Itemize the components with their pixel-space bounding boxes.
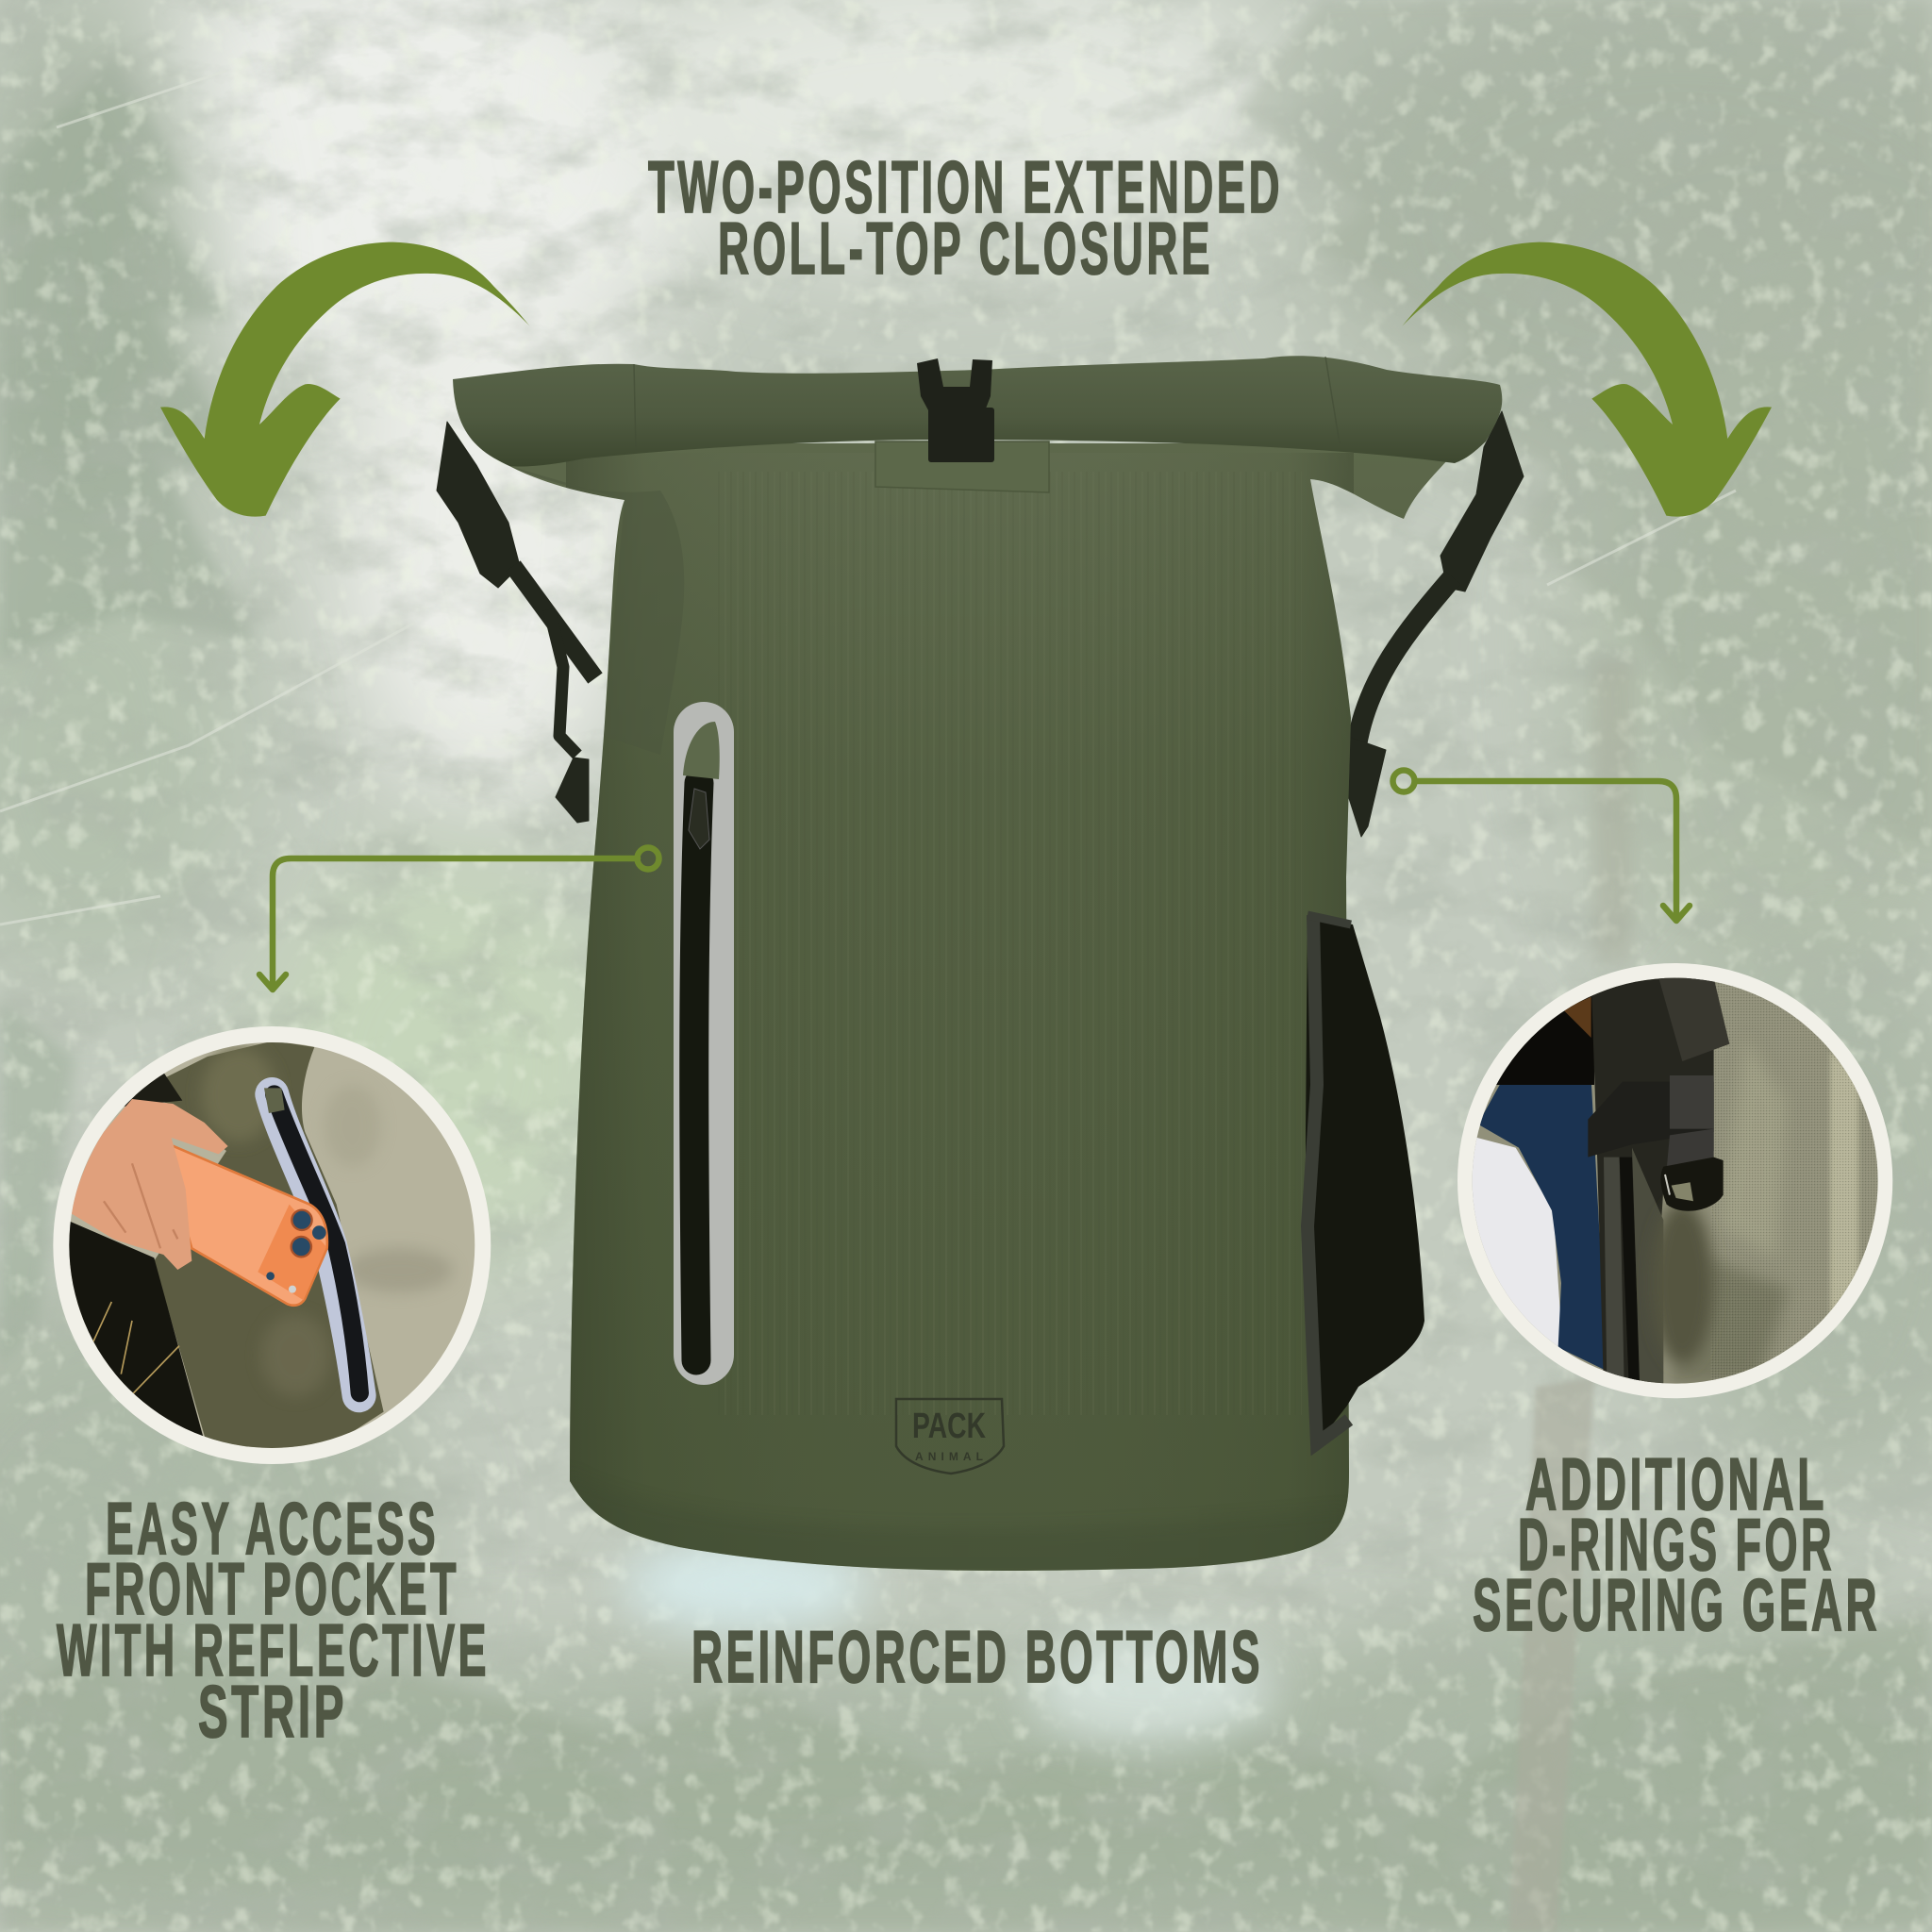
label: easy access front pocket: EASY ACCESS bbox=[106, 1487, 439, 1570]
olive sleeve bbox=[132, 1041, 384, 1456]
label: easy access front pocket: FRONT POCKET bbox=[85, 1547, 459, 1630]
dark upper corner bbox=[1474, 981, 1594, 1085]
label: easy access front pocket bbox=[57, 1487, 490, 1753]
connector: d-ring callout bbox=[1392, 770, 1690, 921]
connector: pocket callout bbox=[259, 847, 658, 990]
side seam bbox=[1591, 978, 1714, 1390]
webbing strap bbox=[1658, 978, 1729, 1061]
backpack bbox=[437, 356, 1524, 1585]
khaki fabric bbox=[69, 1042, 475, 1448]
fabric texture bbox=[509, 453, 1354, 1585]
arrow: left curved bbox=[160, 242, 530, 517]
trunks bbox=[1509, 1377, 1594, 1932]
phone bbox=[170, 1144, 327, 1306]
arrow: right curved bbox=[1402, 242, 1772, 517]
logo: Pack Animal: PACK bbox=[912, 1407, 986, 1446]
right strap and buckle bbox=[1346, 411, 1524, 837]
label: easy access front pocket: STRIP bbox=[198, 1670, 347, 1753]
white surface bbox=[1443, 1129, 1563, 1384]
heading: roll-top closure: ROLL-TOP CLOSURE bbox=[718, 207, 1213, 290]
photo circle: front pocket bbox=[38, 1026, 509, 1472]
mesh side pocket bbox=[1306, 915, 1424, 1449]
label: reinforced bottoms: REINFORCED BOTTOMS bbox=[691, 1615, 1263, 1698]
label: additional d-rings bbox=[1473, 1442, 1880, 1646]
bag body bbox=[509, 443, 1462, 1571]
photo circle: d-ring bbox=[1443, 963, 1915, 1398]
heading: roll-top closure: TWO-POSITION EXTENDED bbox=[648, 145, 1283, 228]
roll-top buckle bbox=[917, 358, 994, 462]
left strap and buckle bbox=[437, 422, 595, 823]
hand bbox=[72, 1099, 228, 1270]
logo: Pack Animal bbox=[896, 1399, 1004, 1474]
black background bbox=[38, 1208, 208, 1453]
reflective zip pocket bbox=[683, 722, 720, 1360]
river glimpse bbox=[623, 1538, 868, 1632]
khaki fabric bbox=[1443, 974, 1915, 1390]
label: easy access front pocket: WITH REFLECTIVE bbox=[57, 1608, 490, 1691]
navy jacket bbox=[1478, 1078, 1607, 1371]
branches bbox=[0, 71, 1736, 924]
top patch bbox=[875, 441, 1049, 492]
logo: Pack Animal: ANIMAL bbox=[915, 1450, 983, 1463]
heading: roll-top closure bbox=[648, 145, 1283, 290]
pocket opening bbox=[272, 1094, 359, 1395]
d-ring bbox=[1660, 1158, 1724, 1211]
roll top bbox=[453, 356, 1502, 467]
